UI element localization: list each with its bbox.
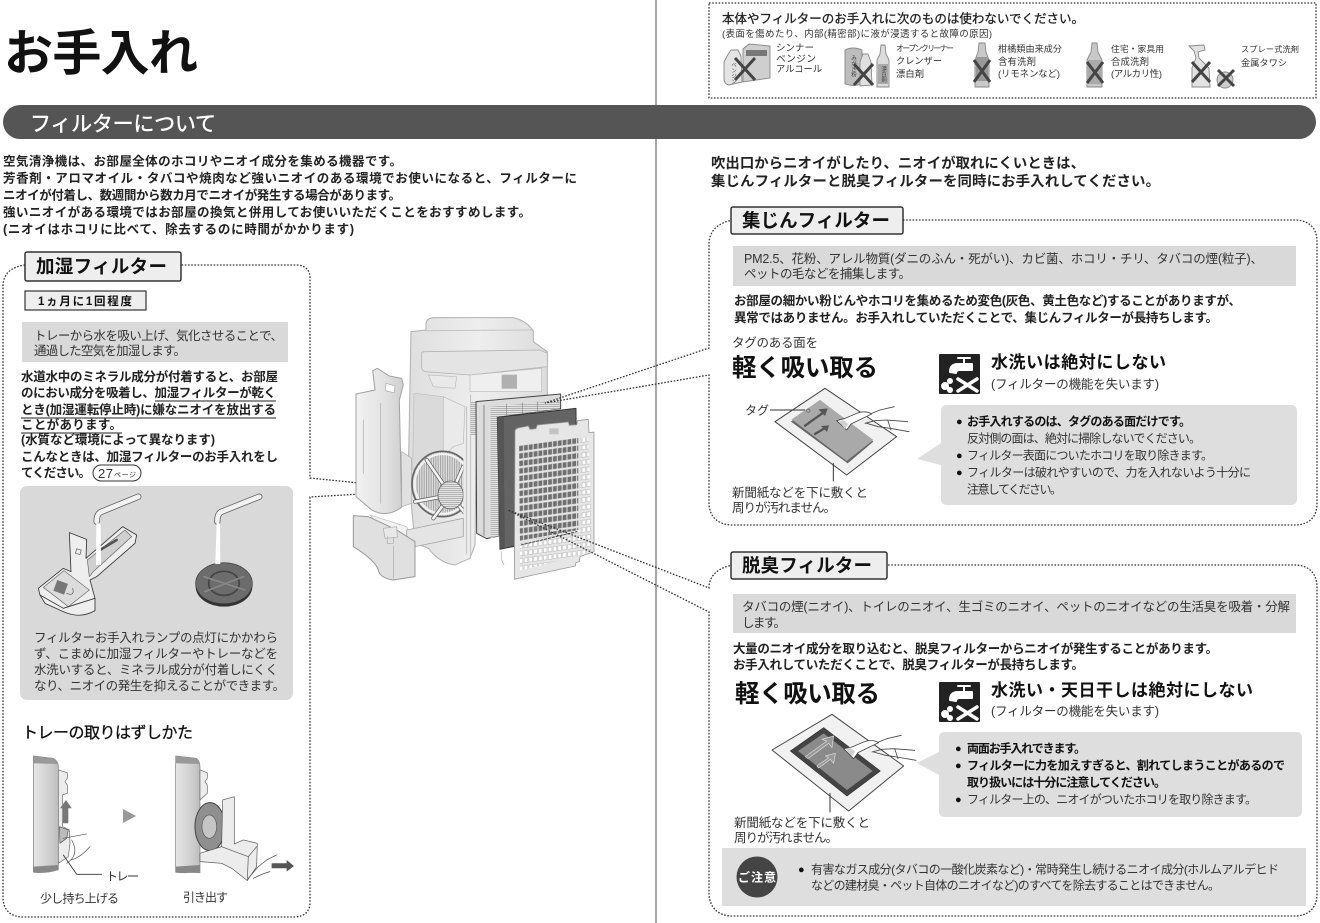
explanation text: 大量のニオイ成分を取り込むと、脱臭フィルターからニオイが発生することがあります。 [733, 641, 1218, 656]
description box: PM2.5、花粉、アレル物質(ダニのふん・死がい)、カビ菌、ホコリ・チリ、タバコの煙(粒子)、 [744, 251, 1263, 266]
section band: filter: フィルターについて [30, 113, 216, 136]
explanation text: 異常ではありません。お手入れしていただくことで、集じんフィルターが長持ちします。 [734, 310, 1218, 325]
warning: no washing or sun drying: 水洗い・天日干しは絶対にしない [991, 681, 1253, 700]
panel: deodorising filter [508, 510, 1317, 916]
tip text: フィルターお手入れランプの点灯にかかわら [34, 631, 278, 645]
instruction: vacuum: 軽く吸い取る [732, 354, 878, 382]
callout: cleaning notes: ● [955, 794, 962, 806]
heading tag: 集じんフィルター [742, 210, 890, 231]
page reference: 27 [98, 466, 113, 481]
heading tag [25, 252, 181, 281]
frequency tag [25, 291, 146, 310]
icon: cleanser bottles: 漂白剤 [880, 65, 887, 84]
icon: cleanser bottles [845, 45, 889, 87]
intro text left: 強いニオイがある環境ではお部屋の換気と併用してお使いいただくことをおすすめします。 [3, 204, 531, 220]
instruction: vacuum: 軽く吸い取る [735, 680, 880, 708]
label: cleanser group: オープンクリーナー [896, 44, 954, 53]
warning: no washing [991, 353, 1166, 392]
warning: no washing: 水洗いは絶対にしない [991, 353, 1166, 372]
intro text left: ニオイが付着し、数週間から数カ月でニオイが発生する場合があります。 [3, 188, 401, 202]
caution box: 有害なガス成分(タバコの一酸化炭素など)・常時発生し続けるニオイ成分(ホルムアルデヒド [811, 862, 1279, 876]
warning: no washing or sun drying: (フィルターの機能を失います) [991, 704, 1159, 718]
tip text: 水洗いすると、ミネラル成分が付着しにくく [34, 662, 278, 677]
icon: cleanser bottles: みがき粉 [850, 55, 857, 78]
callout: cleaning notes: ● [956, 450, 963, 462]
label: household group: 合成洗剤 [1111, 56, 1149, 67]
note: newspaper [734, 815, 870, 845]
warning paragraph: 水道水中のミネラル成分が付着すると、お部屋 [21, 369, 278, 384]
front pre-filter grid [514, 419, 594, 579]
label: cleanser group [896, 44, 954, 79]
callout: cleaning notes: ● [955, 743, 962, 755]
callout: cleaning notes: 取り扱いには十分に注意してください。 [967, 774, 1166, 790]
explanation text: お手入れしていただくことで、脱臭フィルターが長持ちします。 [733, 657, 1084, 672]
section band: filter [3, 105, 1316, 139]
icon: no washing [939, 354, 980, 394]
heading tag [731, 552, 887, 579]
label: spray group: 金属タワシ [1241, 57, 1287, 68]
humidifying filter wheel [411, 450, 464, 520]
heading tag: 加湿フィルター [36, 256, 167, 277]
callout: cleaning notes [917, 405, 1297, 505]
explanation text [734, 293, 1241, 325]
body and lid [408, 318, 547, 565]
caption: tray: トレー [106, 870, 139, 884]
label: thinner group [776, 43, 822, 74]
frequency tag: 1ヵ月に1回程度 [38, 294, 132, 308]
tip text: なり、ニオイの発生を抑えることができます。 [34, 678, 285, 693]
warning: no washing: (フィルターの機能を失います) [991, 376, 1159, 392]
label: citrus group: 柑橘類由来成分 [998, 43, 1062, 54]
label: household group [1111, 43, 1164, 79]
warning note: (表面を傷めたり、内部(精密部)に液が浸透すると故障の原因) [722, 28, 992, 40]
label: household group: (アルカリ性) [1111, 68, 1162, 79]
warning: no washing or sun drying [991, 681, 1253, 718]
callout: cleaning notes: 両面お手入れできます。 [967, 740, 1086, 756]
illustration: air purifier exploded view [353, 318, 594, 580]
intro text right: 集じんフィルターと脱臭フィルターを同時にお手入れしてください。 [711, 172, 1160, 190]
illustration: lift tray [33, 756, 102, 874]
label: thinner group: アルコール [776, 64, 822, 74]
description box: 通過した空気を加湿します。 [34, 343, 186, 358]
intro text left: (ニオイはホコリに比べて、除去するのに時間がかかります) [3, 222, 354, 236]
callout: cleaning notes: ● [955, 760, 962, 772]
page reference: ページ [114, 471, 136, 479]
description box [733, 246, 1296, 286]
intro text right [711, 154, 1160, 190]
callout: cleaning notes: フィルター上の、ニオイがついたホコリを取り除きます。 [967, 792, 1257, 806]
panel: humidifying filter [3, 252, 428, 917]
illustration: vacuuming tag side [775, 388, 909, 481]
label: citrus group: (リモネンなど) [998, 68, 1060, 79]
drawer tray [370, 515, 415, 548]
intro text left [3, 154, 577, 236]
label: cleanser group: クレンザー [896, 56, 942, 66]
label: household group: 住宅・家具用 [1111, 43, 1164, 54]
label: tag [745, 404, 805, 418]
explanation text: お部屋の細かい粉じんやホコリを集めるため変色(灰色、黄土色など)することがありますが、 [734, 293, 1241, 308]
panel: washing tip [20, 486, 293, 700]
title: お手入れ [4, 27, 198, 81]
caution box [722, 848, 1306, 906]
description box: トレーから水を吸い上げ、気化させることで、 [34, 328, 283, 343]
label: thinner group: ベンジン [776, 53, 816, 65]
heading tag: 脱臭フィルター [742, 555, 872, 576]
callout: cleaning notes: 注意してください。 [967, 482, 1062, 496]
icon: spray and metal scrubber [1189, 45, 1234, 88]
callout: cleaning notes [917, 732, 1302, 817]
heading: tray removal: トレーの取りはずしかた [22, 724, 193, 742]
panel: do-not-use cleaning products [709, 3, 1316, 98]
description box: ペットの毛などを捕集します。 [744, 266, 911, 281]
note: newspaper: 新聞紙などを下に敷くと [732, 485, 868, 500]
callout: cleaning notes: お手入れするのは、タグのある面だけです。 [967, 414, 1191, 428]
illustration: washing tray and filter [38, 497, 259, 615]
label: cleanser group: 漂白剤 [896, 68, 924, 79]
label: thinner group: シンナー [776, 43, 814, 54]
caution box: ● [798, 864, 805, 876]
warning paragraph: てください。 [21, 466, 91, 480]
deodorising filter [497, 408, 577, 549]
intro text left: 空気清浄機は、お部屋全体のホコリやニオイ成分を集める機器です。 [3, 154, 402, 168]
note: newspaper: 周りが汚れません。 [732, 500, 836, 515]
caption: lift: 少し持ち上げる [40, 890, 119, 906]
label: citrus group: 含有洗剤 [998, 56, 1036, 67]
note: newspaper [732, 485, 868, 515]
arrow: next step [123, 809, 136, 823]
water tank [356, 368, 403, 514]
icon: thinner can and bottle: ベンジン [730, 62, 737, 84]
description box: タバコの煙(ニオイ)、トイレのニオイ、生ゴミのニオイ、ペットのニオイなどの生活臭を吸着・分解 [742, 599, 1290, 614]
note: newspaper: 新聞紙などを下に敷くと [734, 815, 870, 830]
dust-collecting filter [476, 394, 561, 539]
tip text [34, 631, 285, 693]
callout: cleaning notes: ● [956, 416, 963, 428]
illustration: pull out tray [176, 756, 294, 881]
label: citrus group [998, 43, 1062, 79]
callout: cleaning notes: ● [956, 467, 963, 479]
icon: citrus detergent bottle [974, 43, 990, 87]
caution box: ご注意 [738, 870, 776, 884]
icon: household detergent bottle [1087, 43, 1103, 87]
heading tag [731, 207, 903, 234]
instruction: vacuum: タグのある面を [732, 336, 818, 350]
illustration: vacuuming filter [772, 714, 916, 812]
description box [22, 322, 288, 362]
callout: cleaning notes: 反対側の面は、絶対に掃除しないでください。 [967, 430, 1201, 446]
label: spray group [1241, 44, 1299, 68]
caution box: などの建材臭・ペット自体のニオイなど)のすべてを除去することはできません。 [811, 878, 1220, 892]
tip text: ず、こまめに加湿フィルターやトレーなどを [34, 646, 278, 661]
page reference [93, 465, 141, 481]
warning heading: 本体やフィルターのお手入れに次のものは使わないでください。 [722, 11, 1084, 26]
intro text left: 芳香剤・アロマオイル・タバコや焼肉など強いニオイのある環境でお使いになると、フィルターに [3, 170, 577, 186]
warning paragraph: ことがあります。 [21, 417, 122, 432]
warning paragraph: (水質など環境によって異なります) [21, 432, 215, 447]
description box [733, 594, 1296, 633]
caption: pull: 引き出す [183, 890, 228, 904]
label: tag: タグ [745, 404, 769, 418]
label: spray group: スプレー式洗剤 [1241, 44, 1299, 54]
note: newspaper: 周りが汚れません。 [734, 830, 838, 845]
instruction: vacuum [732, 336, 878, 382]
warning paragraph: のにおい成分を吸着し、加湿フィルターが乾く [21, 385, 276, 400]
icon: thinner can and bottle [724, 44, 770, 85]
icon: no washing [939, 682, 980, 722]
callout: cleaning notes: フィルターは破れやすいので、力を入れないよう十分に [967, 464, 1251, 480]
callout: cleaning notes: フィルター表面についたホコリを取り除きます。 [967, 448, 1213, 462]
warning paragraph: とき(加湿運転停止時)に嫌なニオイを放出する [21, 402, 276, 417]
warning paragraph: こんなときは、加湿フィルターのお手入れをし [21, 449, 278, 464]
warning paragraph [21, 369, 278, 480]
page centre fold line [655, 0, 657, 923]
panel: dust-collecting filter [545, 207, 1317, 525]
description box: します。 [742, 616, 786, 630]
callout: cleaning notes: フィルターに力を加えすぎると、割れてしまうことがあるので [967, 758, 1285, 772]
intro text right: 吹出口からニオイがしたり、ニオイが取れにくいときは、 [711, 154, 1085, 172]
explanation text [733, 641, 1218, 672]
